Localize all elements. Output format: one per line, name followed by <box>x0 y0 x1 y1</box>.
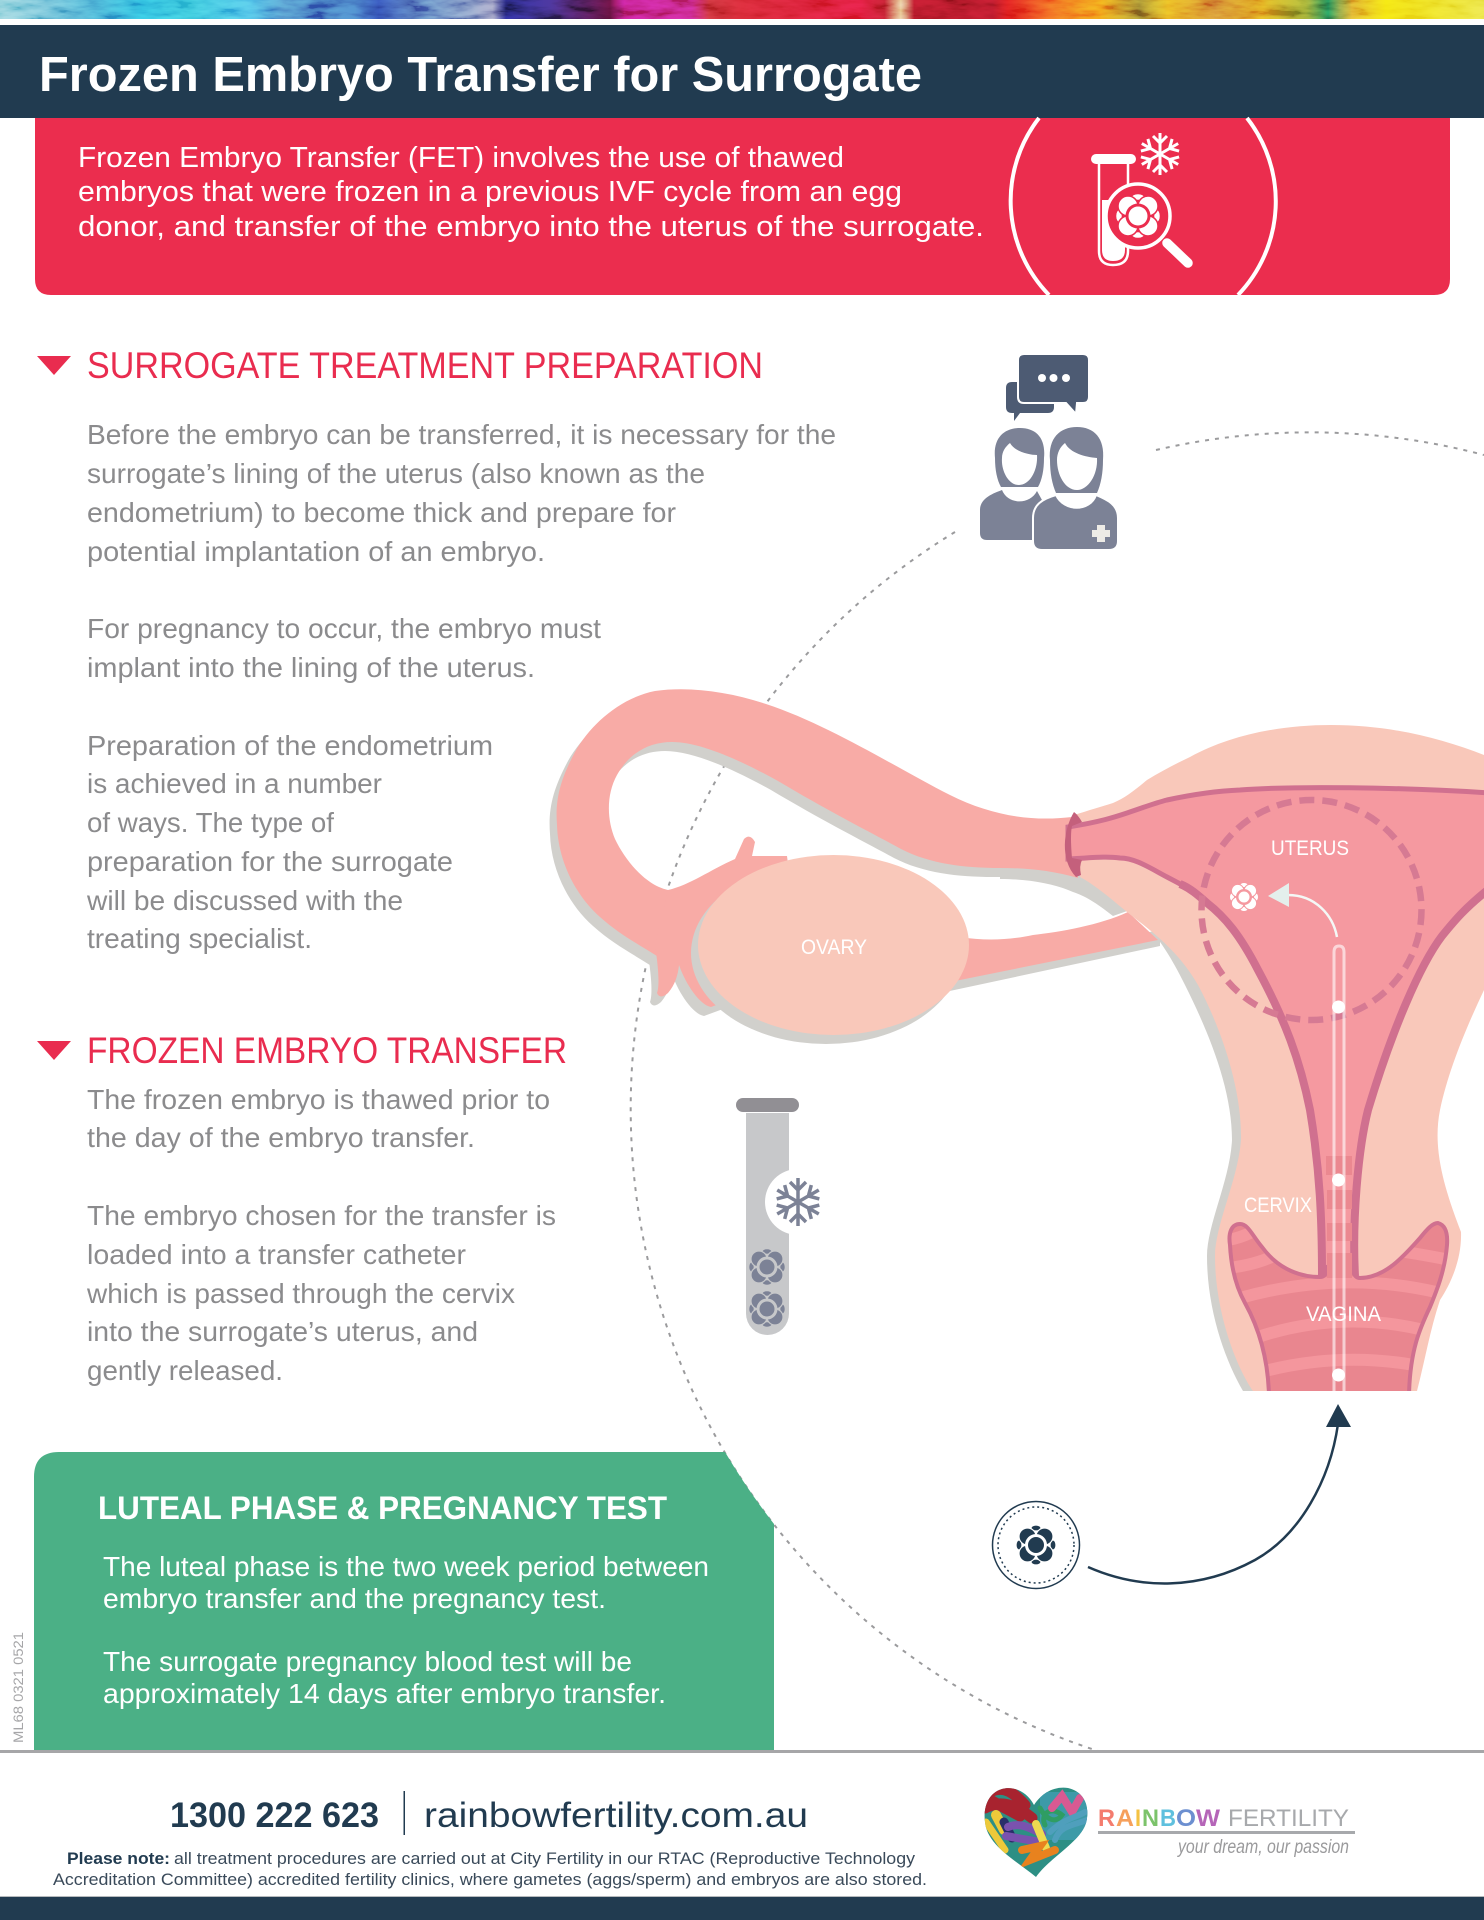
vagina <box>1228 1223 1450 1395</box>
lower ligament <box>945 912 1160 992</box>
intro text: embryos that were frozen in a previous IVF cycle from an egg <box>78 176 902 208</box>
fimbriae shadow <box>648 899 723 1016</box>
heading: surrogate treatment preparation: SURROGATE TREATMENT PREPARATION <box>87 345 763 386</box>
wordmark: N <box>1142 1805 1159 1832</box>
text block: preparation: surrogate’s lining of the uterus (also known as the <box>87 458 705 489</box>
note: Please note: <box>67 1849 170 1868</box>
dashed implantation circle <box>1202 800 1422 1020</box>
contact details <box>170 1791 808 1835</box>
intro text <box>78 142 984 243</box>
labels: UTERUS <box>1271 837 1349 860</box>
fallopian junction band <box>1065 812 1082 877</box>
icon: released embryo <box>1230 882 1258 912</box>
contact details: rainbowfertility.com.au <box>424 1796 808 1835</box>
text block: preparation: Before the embryo can be transferred, it is necessary for the <box>87 419 836 450</box>
dotted circle arc <box>631 432 1484 1751</box>
wordmark: I <box>1135 1805 1141 1832</box>
labels: VAGINA <box>1306 1303 1381 1326</box>
document code: ML68 0321 0521 <box>10 1632 26 1743</box>
logo: rainbow fertility: FERTILITY <box>1228 1805 1349 1832</box>
panel: luteal phase: approximately 14 days after embryo transfer. <box>103 1678 666 1709</box>
intro text: Frozen Embryo Transfer (FET) involves the use of thawed <box>78 142 844 174</box>
text block: preparation: is achieved in a number <box>87 768 382 799</box>
thicker uterine walls <box>1180 884 1484 1276</box>
text block: preparation <box>86 419 836 954</box>
text block: transfer: into the surrogate’s uterus, and <box>87 1316 478 1347</box>
shadow under tube end <box>1000 866 1130 916</box>
note: all treatment procedures are carried out at City Fertility in our RTAC (Reproductive Technology <box>174 1849 916 1868</box>
panel: luteal phase: The surrogate pregnancy blood test will be <box>103 1646 632 1677</box>
icon: frozen embryo test tube with magnifier <box>1011 118 1276 295</box>
text block: preparation: potential implantation of an embryo. <box>87 536 545 567</box>
wordmark: A <box>1116 1805 1134 1832</box>
logo: rainbow fertility: your dream, our passion <box>1176 1837 1349 1858</box>
intro text: donor, and transfer of the embryo into the uterus of the surrogate. <box>78 211 984 243</box>
panel: luteal phase: The luteal phase is the two week period between <box>103 1551 709 1582</box>
embryo 1 <box>749 1249 785 1285</box>
fallopian tube shadow <box>550 698 1060 967</box>
text block: transfer <box>86 1084 556 1386</box>
transfer catheter <box>1332 946 1345 1391</box>
text block: transfer: which is passed through the cervix <box>86 1278 515 1309</box>
wordmark: R <box>1098 1805 1115 1832</box>
cervix stripes <box>1326 1156 1352 1278</box>
large speech bubble <box>1018 354 1089 414</box>
arrow: embryo to catheter <box>1088 1404 1351 1583</box>
uterus outer wall <box>1074 725 1484 1391</box>
small speech bubble <box>1006 382 1054 421</box>
snowflake <box>773 1178 823 1226</box>
text block: preparation: implant into the lining of the uterus. <box>87 652 535 683</box>
icon: care team people with speech bubbles <box>980 354 1118 550</box>
ovary: OVARY <box>801 936 867 959</box>
medical cross <box>1092 525 1110 542</box>
text block: transfer: The frozen embryo is thawed prior to <box>87 1084 550 1115</box>
text block: transfer: loaded into a transfer catheter <box>87 1239 466 1270</box>
embryo 2 <box>749 1291 785 1327</box>
right person <box>1033 427 1118 550</box>
icon: painted heart <box>984 1788 1088 1877</box>
panel: luteal phase: LUTEAL PHASE & PREGNANCY TEST <box>98 1490 667 1526</box>
text block: transfer: gently released. <box>87 1355 283 1386</box>
heading: frozen embryo transfer: FROZEN EMBRYO TRANSFER <box>87 1030 567 1071</box>
icon: frozen embryo tube <box>736 1098 831 1335</box>
uterus body shadow <box>1127 900 1300 1391</box>
labels: CERVIX <box>1244 1194 1312 1217</box>
text block: transfer: The embryo chosen for the transfer is <box>87 1200 556 1231</box>
text block: preparation: For pregnancy to occur, the embryo must <box>87 613 601 644</box>
note: Accreditation Committee) accredited fertility clinics, where gametes (aggs/sperm) and embryos are also stored. <box>53 1870 927 1889</box>
wordmark: O <box>1176 1805 1196 1832</box>
footer <box>0 1750 1484 1920</box>
uterine cavity <box>1068 788 1484 1276</box>
text block: preparation: endometrium) to become thick and prepare for <box>87 497 676 528</box>
contact details: 1300 222 623 <box>170 1796 379 1835</box>
wordmark <box>1098 1805 1220 1832</box>
panel: introduction <box>35 118 1450 295</box>
fimbriae <box>655 837 790 1007</box>
text block: preparation: preparation for the surrogate <box>87 846 453 877</box>
fallopian tube <box>557 689 1078 958</box>
anatomy illustration: reproductive system <box>550 689 1484 1395</box>
text block: transfer: the day of the embryo transfer. <box>87 1122 475 1153</box>
text block: preparation: Preparation of the endometrium <box>87 730 493 761</box>
panel: luteal phase <box>34 1452 774 1750</box>
text block: preparation: treating specialist. <box>87 923 312 954</box>
title banner <box>0 25 1484 118</box>
title banner: Frozen Embryo Transfer for Surrogate <box>39 48 922 102</box>
labels <box>1244 837 1381 1326</box>
arrow: embryo release <box>1268 883 1337 937</box>
wordmark: B <box>1160 1805 1176 1832</box>
text block: preparation: will be discussed with the <box>86 885 403 916</box>
panel: luteal phase: embryo transfer and the pregnancy test. <box>103 1583 606 1614</box>
note <box>53 1849 927 1889</box>
ovary <box>691 855 969 1044</box>
rainbow paint strip <box>0 0 1484 19</box>
wordmark: W <box>1196 1805 1220 1832</box>
logo: rainbow fertility <box>980 1785 1355 1880</box>
icon: embryo in circle <box>992 1502 1080 1588</box>
left person <box>980 428 1044 540</box>
text block: preparation: of ways. The type of <box>87 807 334 838</box>
bottom band <box>0 1896 1484 1920</box>
